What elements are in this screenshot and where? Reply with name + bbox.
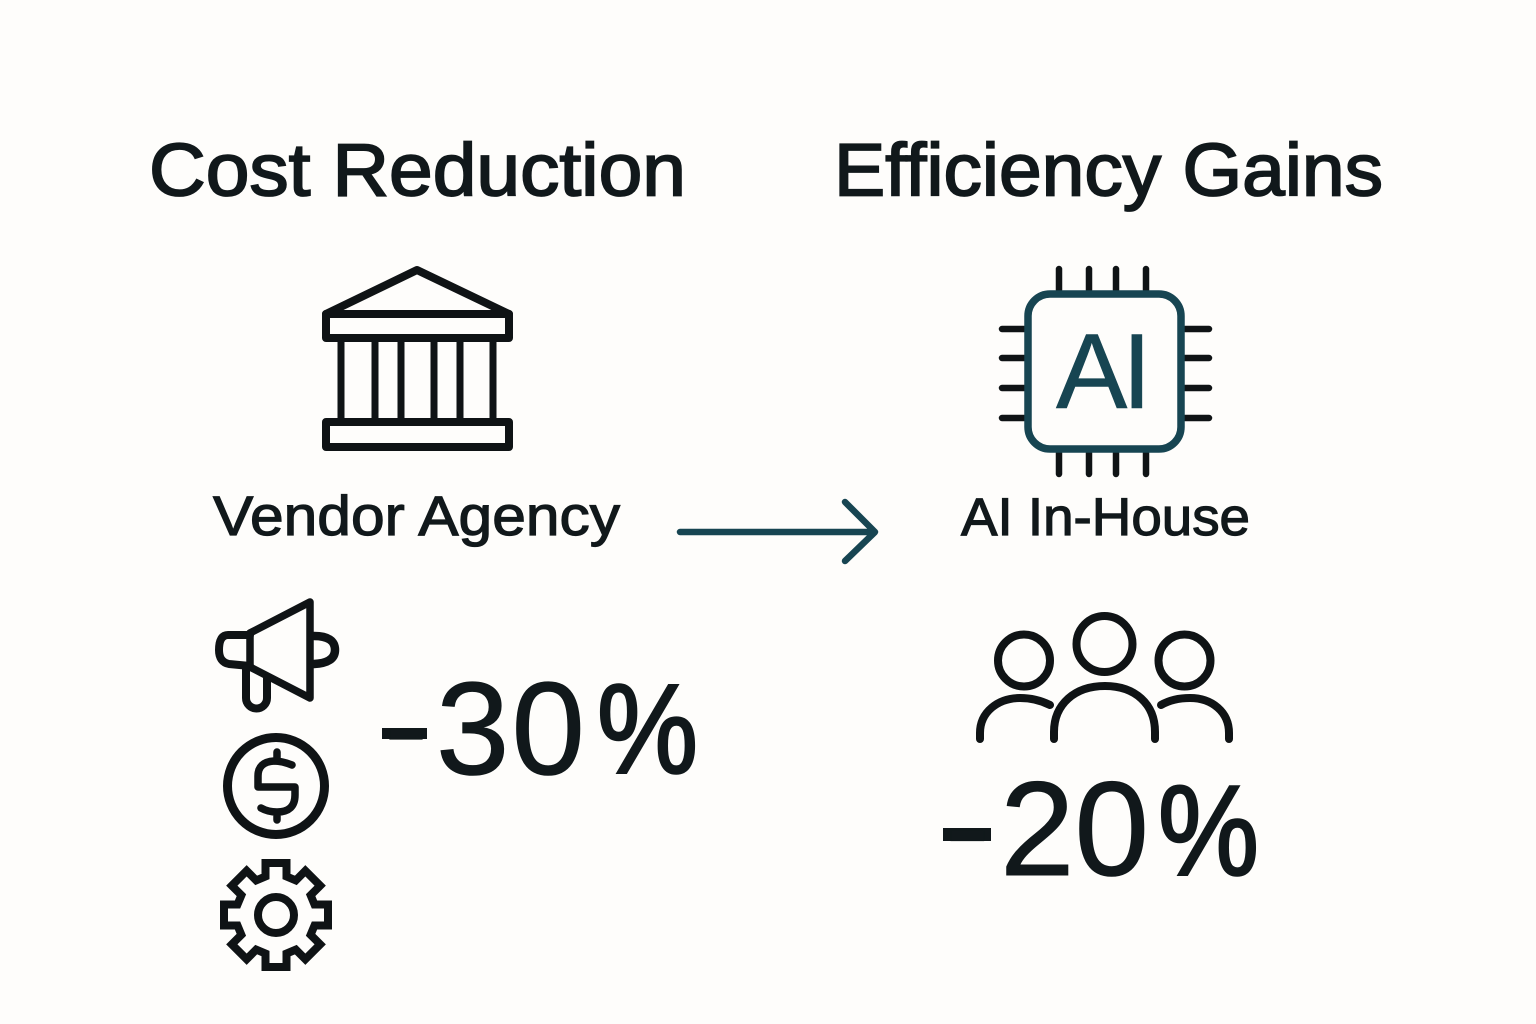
icon: team of people <box>980 616 1229 739</box>
icon: megaphone <box>219 602 335 708</box>
icon: bank building <box>326 270 509 447</box>
icon: dollar coin <box>228 738 324 834</box>
label: AI In-House: AI In-House <box>961 488 1250 547</box>
stat: -30% <box>382 650 698 802</box>
icon: AI chip <box>1002 269 1209 474</box>
heading: Cost Reduction: Cost Reduction <box>149 128 686 212</box>
stat: -20%: - <box>945 751 990 900</box>
stat: -30%: 30 <box>436 655 585 802</box>
stat: -20%: 20 <box>1000 755 1149 904</box>
heading: Efficiency Gains: Efficiency Gains <box>834 128 1383 212</box>
stat: -30%: - <box>384 650 428 797</box>
stat: -20% <box>943 751 1259 904</box>
icon: AI chip: AI <box>1056 311 1152 431</box>
stat: -20%: % <box>1158 760 1259 903</box>
arrow <box>680 502 875 561</box>
label: Vendor Agency: Vendor Agency <box>213 484 620 547</box>
stat: -30%: % <box>597 658 698 800</box>
icon: gear <box>224 863 328 967</box>
